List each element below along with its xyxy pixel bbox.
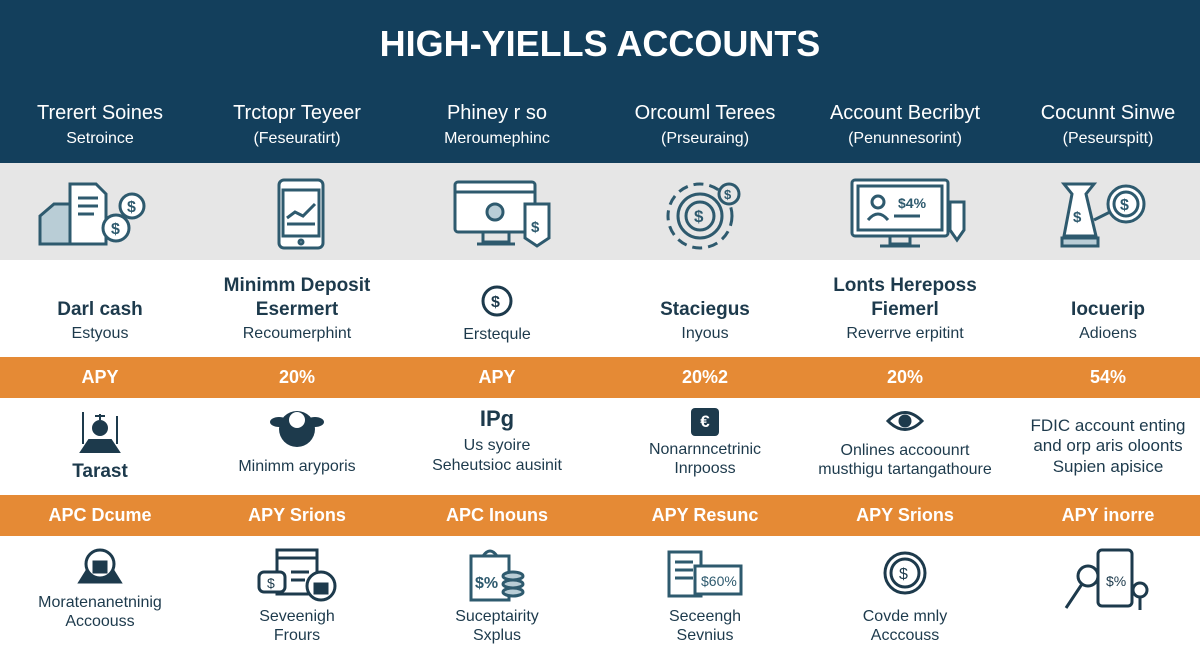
row 6 col 2: Frours (274, 627, 320, 644)
row 4 col 3: Seheutsioc ausinit (432, 457, 562, 474)
row 6 col 6 (1064, 548, 1148, 610)
row 6 col 4: Seceengh (669, 608, 741, 625)
row 4 col 6: and orp aris oloonts (1033, 436, 1183, 455)
row 2 text col 5: Lonts Hereposs (833, 275, 977, 296)
row 6 col 5: Acccouss (871, 627, 939, 644)
row 6 col 3: $% (475, 575, 498, 592)
row 4 col 5: Onlines accoounrt (841, 442, 969, 459)
text: 20% (887, 367, 923, 387)
text: APY Srions (856, 505, 954, 525)
column headers: Setroince (66, 130, 134, 147)
header col 2: Trctopr Teyeer (233, 102, 361, 124)
row 2 col 3 coin and text: $ (491, 294, 500, 311)
row 2 text col 6: Adioens (1079, 325, 1137, 342)
row 2 text col 1 (57, 299, 143, 342)
header col 5: (Penunnesorint) (848, 130, 962, 147)
header col 4: Orcouml Terees (635, 102, 775, 124)
row 6 col 2: Seveenigh (259, 608, 335, 625)
row 2 text col 2 (224, 275, 370, 342)
header col 2 (233, 102, 361, 147)
gray icon band (0, 163, 1200, 260)
row 2 col 3 coin and text (463, 286, 531, 343)
icon: coin circles (666, 182, 740, 250)
row 2 text col 6 (1071, 299, 1145, 342)
header col 5: Account Becribyt (830, 102, 980, 124)
row 4 col 4: Nonarnncetrinic (649, 441, 761, 458)
row 4 col 2: Minimm aryporis (238, 458, 356, 475)
header col 6: Cocunnt Sinwe (1041, 102, 1175, 124)
column headers: Trerert Soines (37, 102, 163, 124)
row 4 col 5: musthigu tartangathoure (818, 461, 992, 478)
row 4 col 6: FDIC account enting (1031, 416, 1185, 435)
icon: house document coins: $ (127, 199, 136, 216)
row 2 text col 5: Fiemerl (871, 299, 939, 320)
header col 6: (Peseurspitt) (1063, 130, 1153, 147)
row 6 col 2: $ (267, 575, 275, 591)
icon: house document coins (38, 182, 146, 246)
orange band 1 (0, 357, 1200, 398)
row 4 col 3: Us syoire (464, 437, 530, 454)
row 2 text col 2: Recoumerphint (243, 325, 351, 342)
row 6 col 5: $ (899, 566, 908, 583)
text: APY (478, 367, 516, 387)
text: APC Inouns (446, 505, 548, 525)
row 2 text col 4 (660, 299, 750, 342)
row 4 col 6 (1031, 416, 1185, 476)
row 4 col 4 (649, 408, 761, 477)
text: 54% (1090, 367, 1126, 387)
APY row: APY (81, 367, 118, 387)
icon: coin circles: $ (694, 207, 704, 226)
text: APY Resunc (652, 505, 758, 525)
text: 20%2 (682, 367, 728, 387)
row 4 col 3: IPg (480, 406, 514, 431)
row 2 text col 5 (833, 275, 977, 342)
row 4 col 1 icon and text: Tarast (72, 461, 128, 482)
orange band 2 (0, 495, 1200, 536)
icon: bag and coin (1060, 182, 1146, 248)
row 6 col 6: $% (1106, 573, 1126, 589)
header col 4 (635, 102, 775, 147)
row 4 col 1 icon and text (72, 412, 128, 482)
row 4 col 3 (432, 406, 562, 474)
icon: monitor (454, 180, 550, 248)
text: APY inorre (1062, 505, 1154, 525)
row 6 col 3 (455, 550, 539, 644)
header col 6 (1041, 102, 1175, 147)
text: APY Srions (248, 505, 346, 525)
row 2 text col 4: Inyous (681, 325, 729, 342)
row 4 col 2 (238, 411, 356, 475)
row 6 col 1: Accoouss (65, 613, 135, 630)
row 4 col 4: Inrpooss (674, 460, 736, 477)
text: 20% (279, 367, 315, 387)
row 2 text col 6: Iocuerip (1071, 299, 1145, 320)
column headers (37, 102, 163, 147)
header col 2: (Feseuratirt) (253, 130, 341, 147)
header col 3: Meroumephinc (444, 130, 550, 147)
icon: coin circles: $ (724, 187, 732, 202)
row 6 col 3: Sxplus (473, 627, 521, 644)
icon: bag and coin: $ (1120, 197, 1129, 214)
row 6 col 4: $60% (701, 573, 737, 589)
header col 3 (444, 102, 550, 147)
icon: monitor: $ (531, 219, 540, 236)
row 2 col 3 coin and text: Erstequle (463, 326, 531, 343)
row 2 text col 2: Esermert (256, 299, 338, 320)
icon: bag and coin: $ (1073, 209, 1082, 226)
row 2 text col 5: Reverrve erpitint (846, 325, 964, 342)
title: HIGH-YIELLS ACCOUNTS (380, 23, 820, 64)
row 6 col 5 (863, 552, 948, 644)
header col 4: (Prseuraing) (661, 130, 749, 147)
row 6 col 1: Moratenanetninig (38, 594, 162, 611)
icon: monitor with percent (850, 178, 966, 248)
row 2 text col 4: Staciegus (660, 299, 750, 320)
row 6 col 1 (38, 548, 162, 630)
row 6 col 3: Suceptairity (455, 608, 539, 625)
APY row 2: APC Dcume (48, 505, 152, 525)
header col 3: Phiney r so (447, 102, 547, 124)
row 2 text col 1: Darl cash (57, 299, 143, 320)
icon: house document coins: $ (111, 221, 120, 238)
row 4 col 4: € (700, 412, 710, 431)
row 4 col 5 (818, 411, 992, 478)
row 4 col 6: Supien apisice (1053, 457, 1163, 476)
row 2 text col 2: Minimm Deposit (224, 275, 370, 296)
row 6 col 2 (258, 548, 336, 644)
row 6 col 5: Covde mnly (863, 608, 947, 625)
row 2 text col 1: Estyous (72, 325, 128, 342)
row 6 col 4: Sevnius (677, 627, 733, 644)
row 6 col 4 (668, 550, 742, 644)
icon: phone chart (278, 178, 324, 250)
header band (0, 0, 1200, 163)
header col 5 (830, 102, 980, 147)
icon: monitor with percent: $4% (898, 195, 927, 211)
